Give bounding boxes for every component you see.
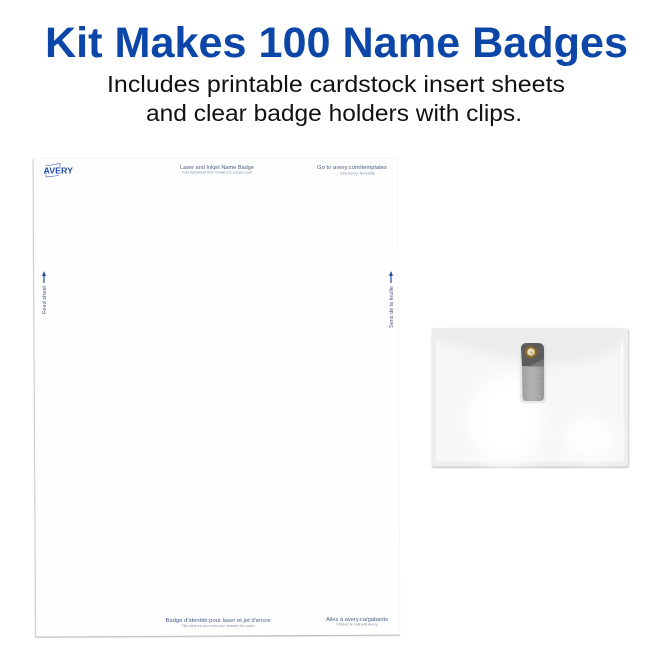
feed direction right: Sens de la feuille [389,286,395,328]
Avery logo [44,164,74,177]
clip [520,343,546,403]
sheet header: product name: Fold backward then forward to crease card [182,170,252,174]
subtitle: and clear badge holders with clips. [146,100,522,126]
sheet header: template link: Use Avery Template [340,172,375,176]
sheet footer: product name: Badge d'identité pour laser et jet d'encre [166,618,270,624]
sheet header: template link [317,165,387,176]
feed direction left: Feed sheet [42,286,48,314]
subtitle: Includes printable cardstock insert sheets [107,71,565,97]
sheet header: product name [180,165,254,174]
panel: clear badge holder with clip [432,328,629,468]
feed direction left [42,271,48,314]
title: Kit Makes 100 Name Badges [45,19,628,67]
subtitle [107,71,565,126]
Avery logo: AVERY [44,166,74,176]
panel: cardstock insert sheet [34,159,400,637]
sheet footer: product name: Plier dans les deux sens pour détacher les cartes [182,624,255,628]
sheet header: template link: Go to avery.com/templates [317,165,387,171]
sheet footer: template link [326,617,388,626]
sheet footer: product name [166,618,270,628]
sheet header: product name: Laser and Inkjet Name Badge [180,165,254,171]
sheet footer: template link: Allez à avery.ca/gabarits [326,617,388,623]
sheet footer: template link: Utilisez le Gabarit Avery [336,622,378,626]
